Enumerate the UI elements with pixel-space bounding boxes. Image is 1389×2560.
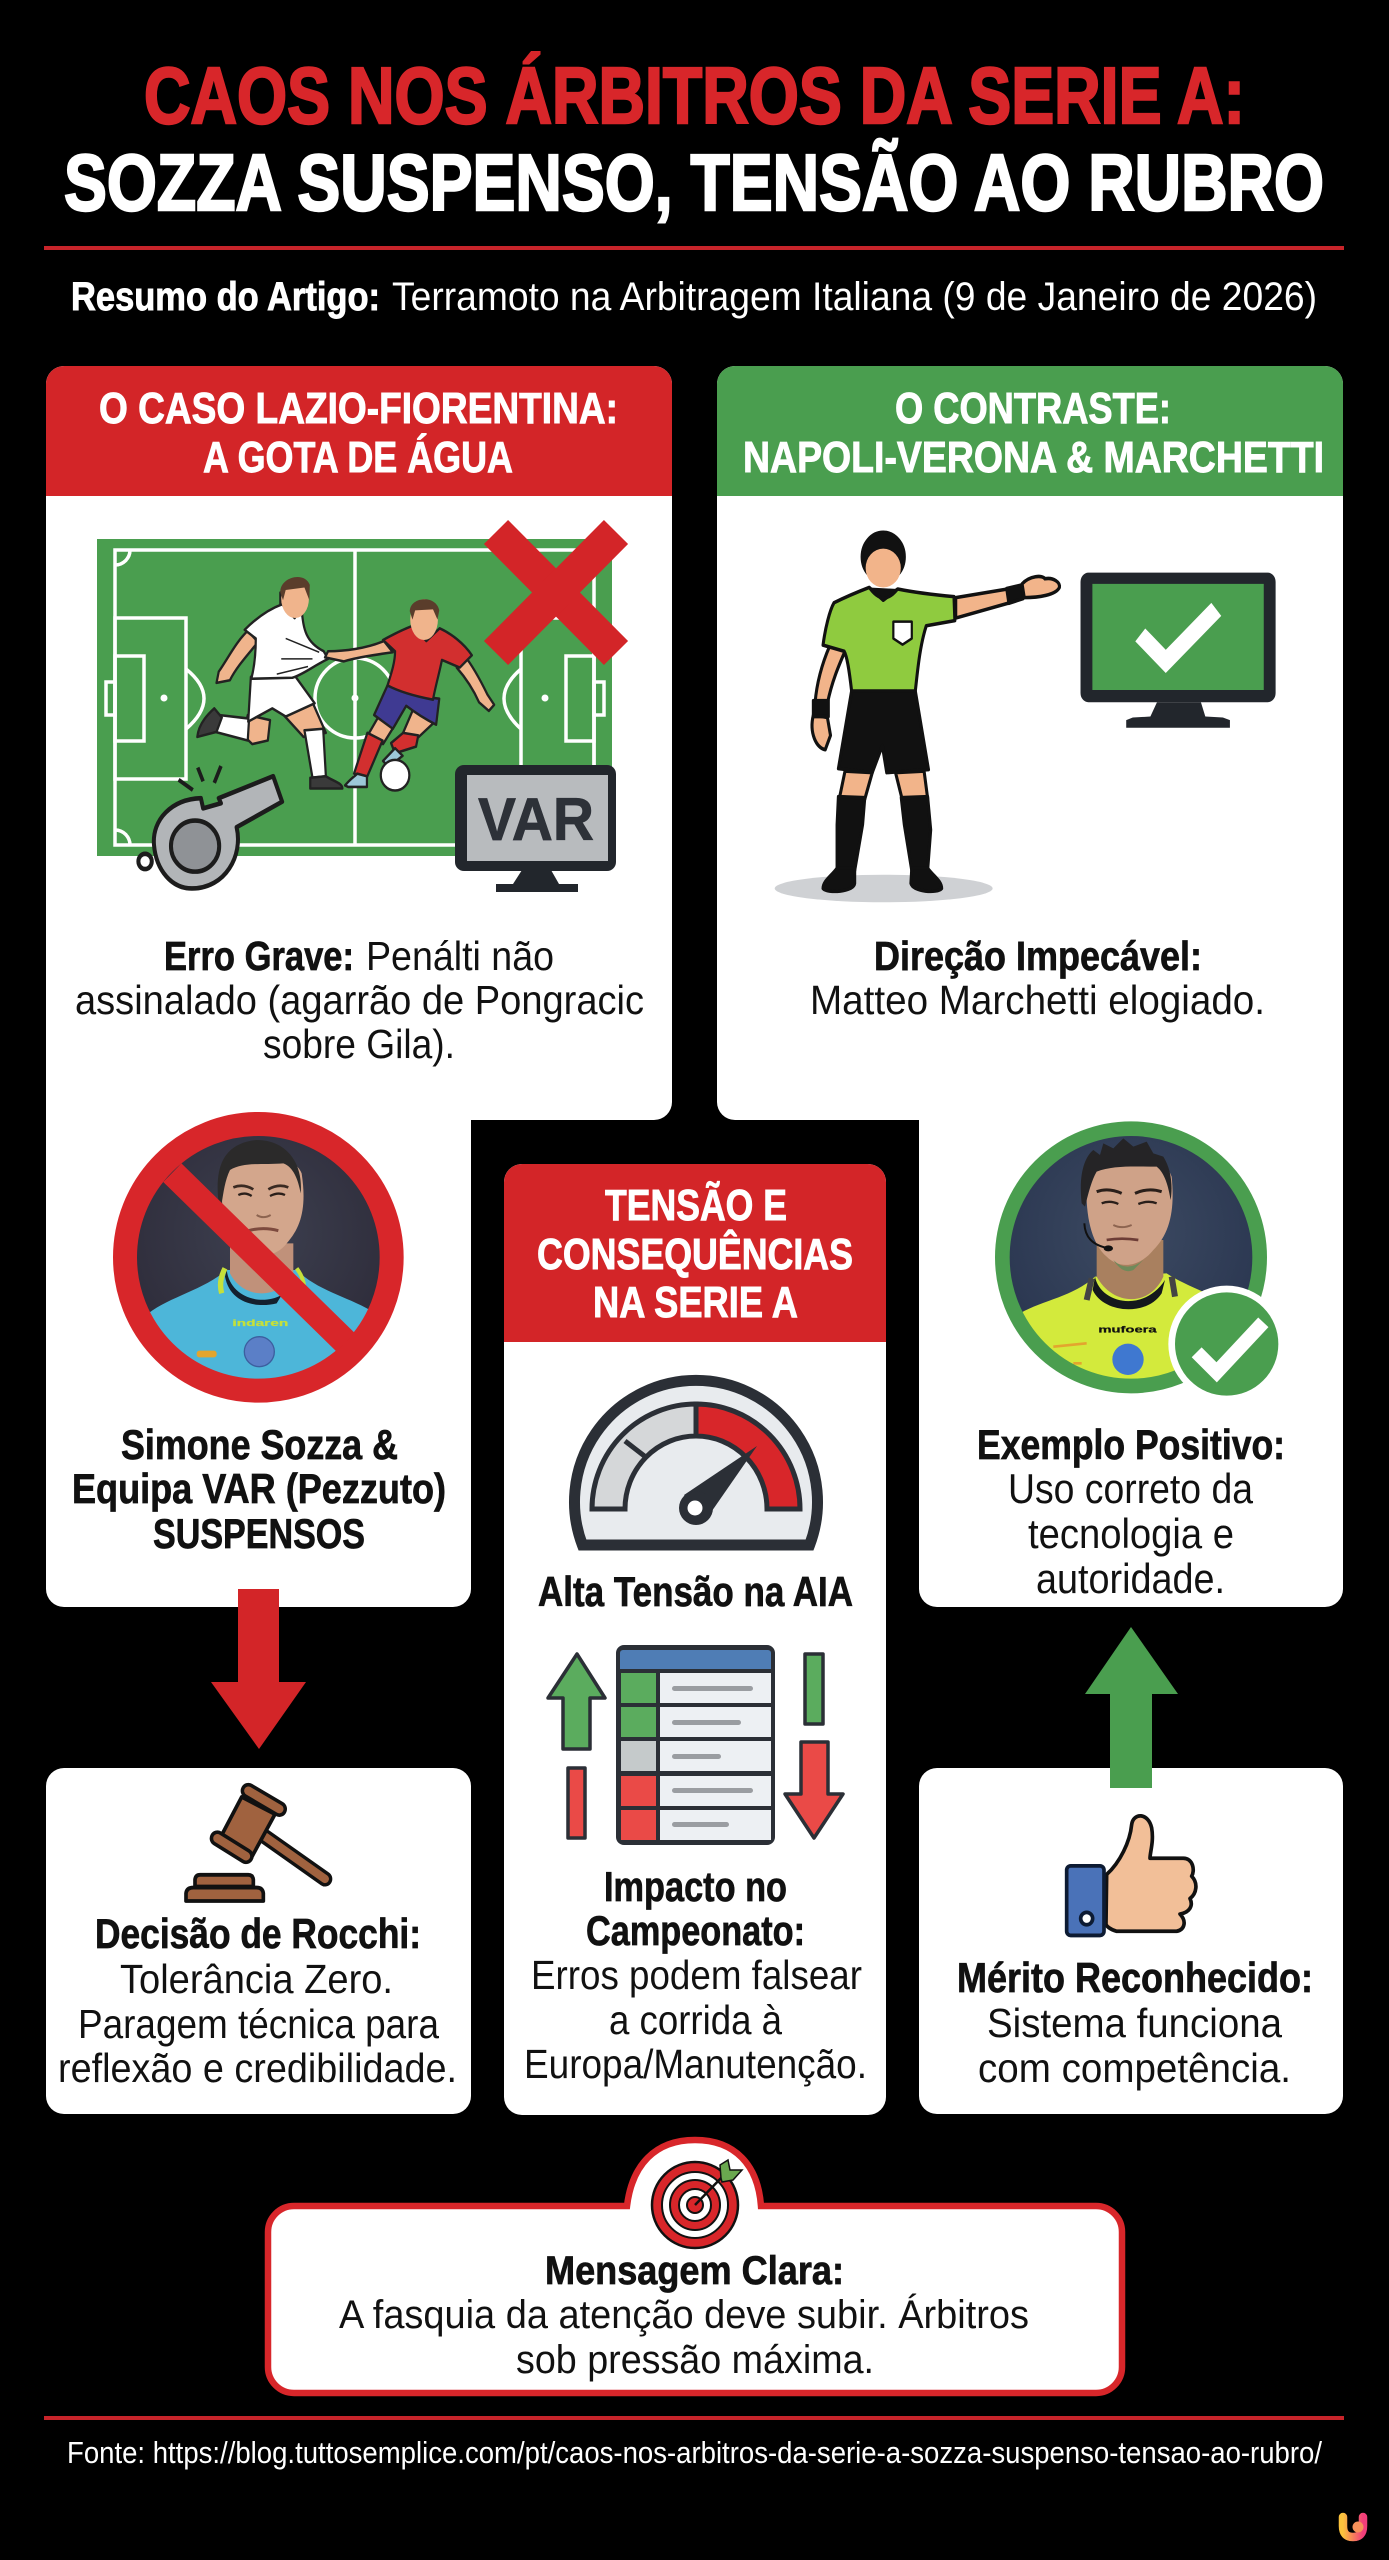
icon: VAR monitor [455, 765, 616, 892]
heading: Lazio-Fiorentina: A GOTA DE ÁGUA [203, 432, 513, 482]
football pitch illustration [97, 539, 612, 856]
icon: players [197, 577, 494, 791]
panel: mérito reconhecido [919, 1768, 1343, 2114]
heading: Lazio-Fiorentina [46, 366, 672, 496]
panel: tensão e consequências [504, 1164, 886, 2115]
text: decisão [58, 1910, 457, 2091]
text: erro grave: Penálti não [366, 933, 554, 979]
icon: logo [1343, 2517, 1364, 2537]
icon: whistle [138, 766, 282, 888]
text: mérito: Mérito Reconhecido: [957, 1954, 1313, 2001]
text: erro grave: Erro Grave: [164, 933, 354, 979]
text: impacto: Impacto no [604, 1863, 787, 1910]
heading: tensão: NA SERIE A [593, 1278, 798, 1327]
subtitle: Resumo do Artigo: [71, 275, 380, 319]
text: exemplo positivo [977, 1421, 1285, 1602]
text: impacto: a corrida à [609, 1997, 782, 2043]
panel: mensagem clara [268, 2140, 1122, 2393]
text: direção impecável [810, 933, 1265, 1023]
panel: decisão de Rocchi [46, 1768, 471, 2114]
text: erro grave: sobre Gila). [263, 1021, 455, 1067]
text: exemplo positivo: autoridade. [1036, 1555, 1225, 1602]
text: mérito [957, 1954, 1313, 2091]
panel: Napoli-Verona [717, 366, 1343, 1607]
heading: Lazio-Fiorentina: O CASO LAZIO-FIORENTINA: [99, 384, 618, 433]
icon: thumbs up [1067, 1816, 1196, 1935]
heading: tensão [504, 1164, 886, 1342]
text: suspended: Simone Sozza & [121, 1421, 398, 1468]
text: decisão: reflexão e credibilidade. [58, 2045, 457, 2091]
text: impacto [524, 1863, 867, 2087]
text: decisão: Tolerância Zero. [120, 1956, 393, 2002]
icon: suspended referee portrait [125, 1124, 392, 1391]
text: mérito: Sistema funciona [987, 2000, 1282, 2046]
text: suspended [72, 1421, 446, 1557]
icon: approved referee portrait [1002, 1129, 1285, 1402]
icon: approved referee portrait: mufoera [1098, 1324, 1158, 1334]
icon: red cross [496, 532, 616, 653]
text: impacto: Campeonato: [586, 1907, 805, 1954]
text: suspended: SUSPENSOS [153, 1510, 365, 1557]
text: exemplo positivo: Exemplo Positivo: [977, 1421, 1285, 1468]
text: decisão: Decisão de Rocchi: [95, 1910, 421, 1957]
icon: referee pointing [775, 532, 1060, 902]
heading: Napoli-Verona: O CONTRASTE: [895, 384, 1171, 433]
text: erro grave: assinalado (agarrão de Pongracic [75, 977, 644, 1023]
panel: Lazio-Fiorentina [46, 366, 672, 1607]
text: exemplo positivo: tecnologia e [1028, 1510, 1234, 1557]
heading: Napoli-Verona [717, 366, 1343, 496]
icon: suspended referee portrait: indaren [232, 1318, 289, 1328]
heading: tensão: CONSEQUÊNCIAS [537, 1229, 853, 1279]
text: alta tensão: Alta Tensão na AIA [538, 1568, 853, 1615]
text: impacto: Europa/Manutenção. [524, 2041, 867, 2087]
arrow: green up [1085, 1627, 1178, 1788]
icon: target [652, 2160, 742, 2248]
subtitle: Terramoto na Arbitragem Italiana (9 de Janeiro de 2026) [392, 275, 1317, 319]
text: mensagem: Mensagem Clara: [545, 2249, 844, 2293]
text: exemplo positivo: Uso correto da [1008, 1465, 1254, 1512]
text: mensagem [339, 2249, 1029, 2382]
text: mérito: com competência. [978, 2045, 1291, 2091]
icon: gavel [186, 1791, 325, 1901]
icon: league table with arrows [548, 1645, 843, 1845]
arrow: red down [211, 1589, 306, 1749]
icon: gauge [574, 1380, 818, 1545]
text: decisão: Paragem técnica para [78, 2001, 439, 2047]
title [64, 51, 1324, 227]
text: direção impecável: Direção Impecável: [874, 933, 1202, 979]
text: mensagem: A fasquia da atenção deve subir. Árbitros [339, 2292, 1029, 2337]
text: suspended: Equipa VAR (Pezzuto) [72, 1465, 446, 1512]
text: erro grave [75, 933, 644, 1067]
icon: VAR monitor: VAR [478, 786, 594, 853]
text: mensagem: sob pressão máxima. [516, 2338, 874, 2382]
icon: monitor with check [1081, 573, 1276, 728]
heading: tensão: TENSÃO E [605, 1180, 787, 1230]
text: impacto: Erros podem falsear [531, 1952, 862, 1998]
text: direção impecável: Matteo Marchetti elogiado. [810, 977, 1265, 1023]
